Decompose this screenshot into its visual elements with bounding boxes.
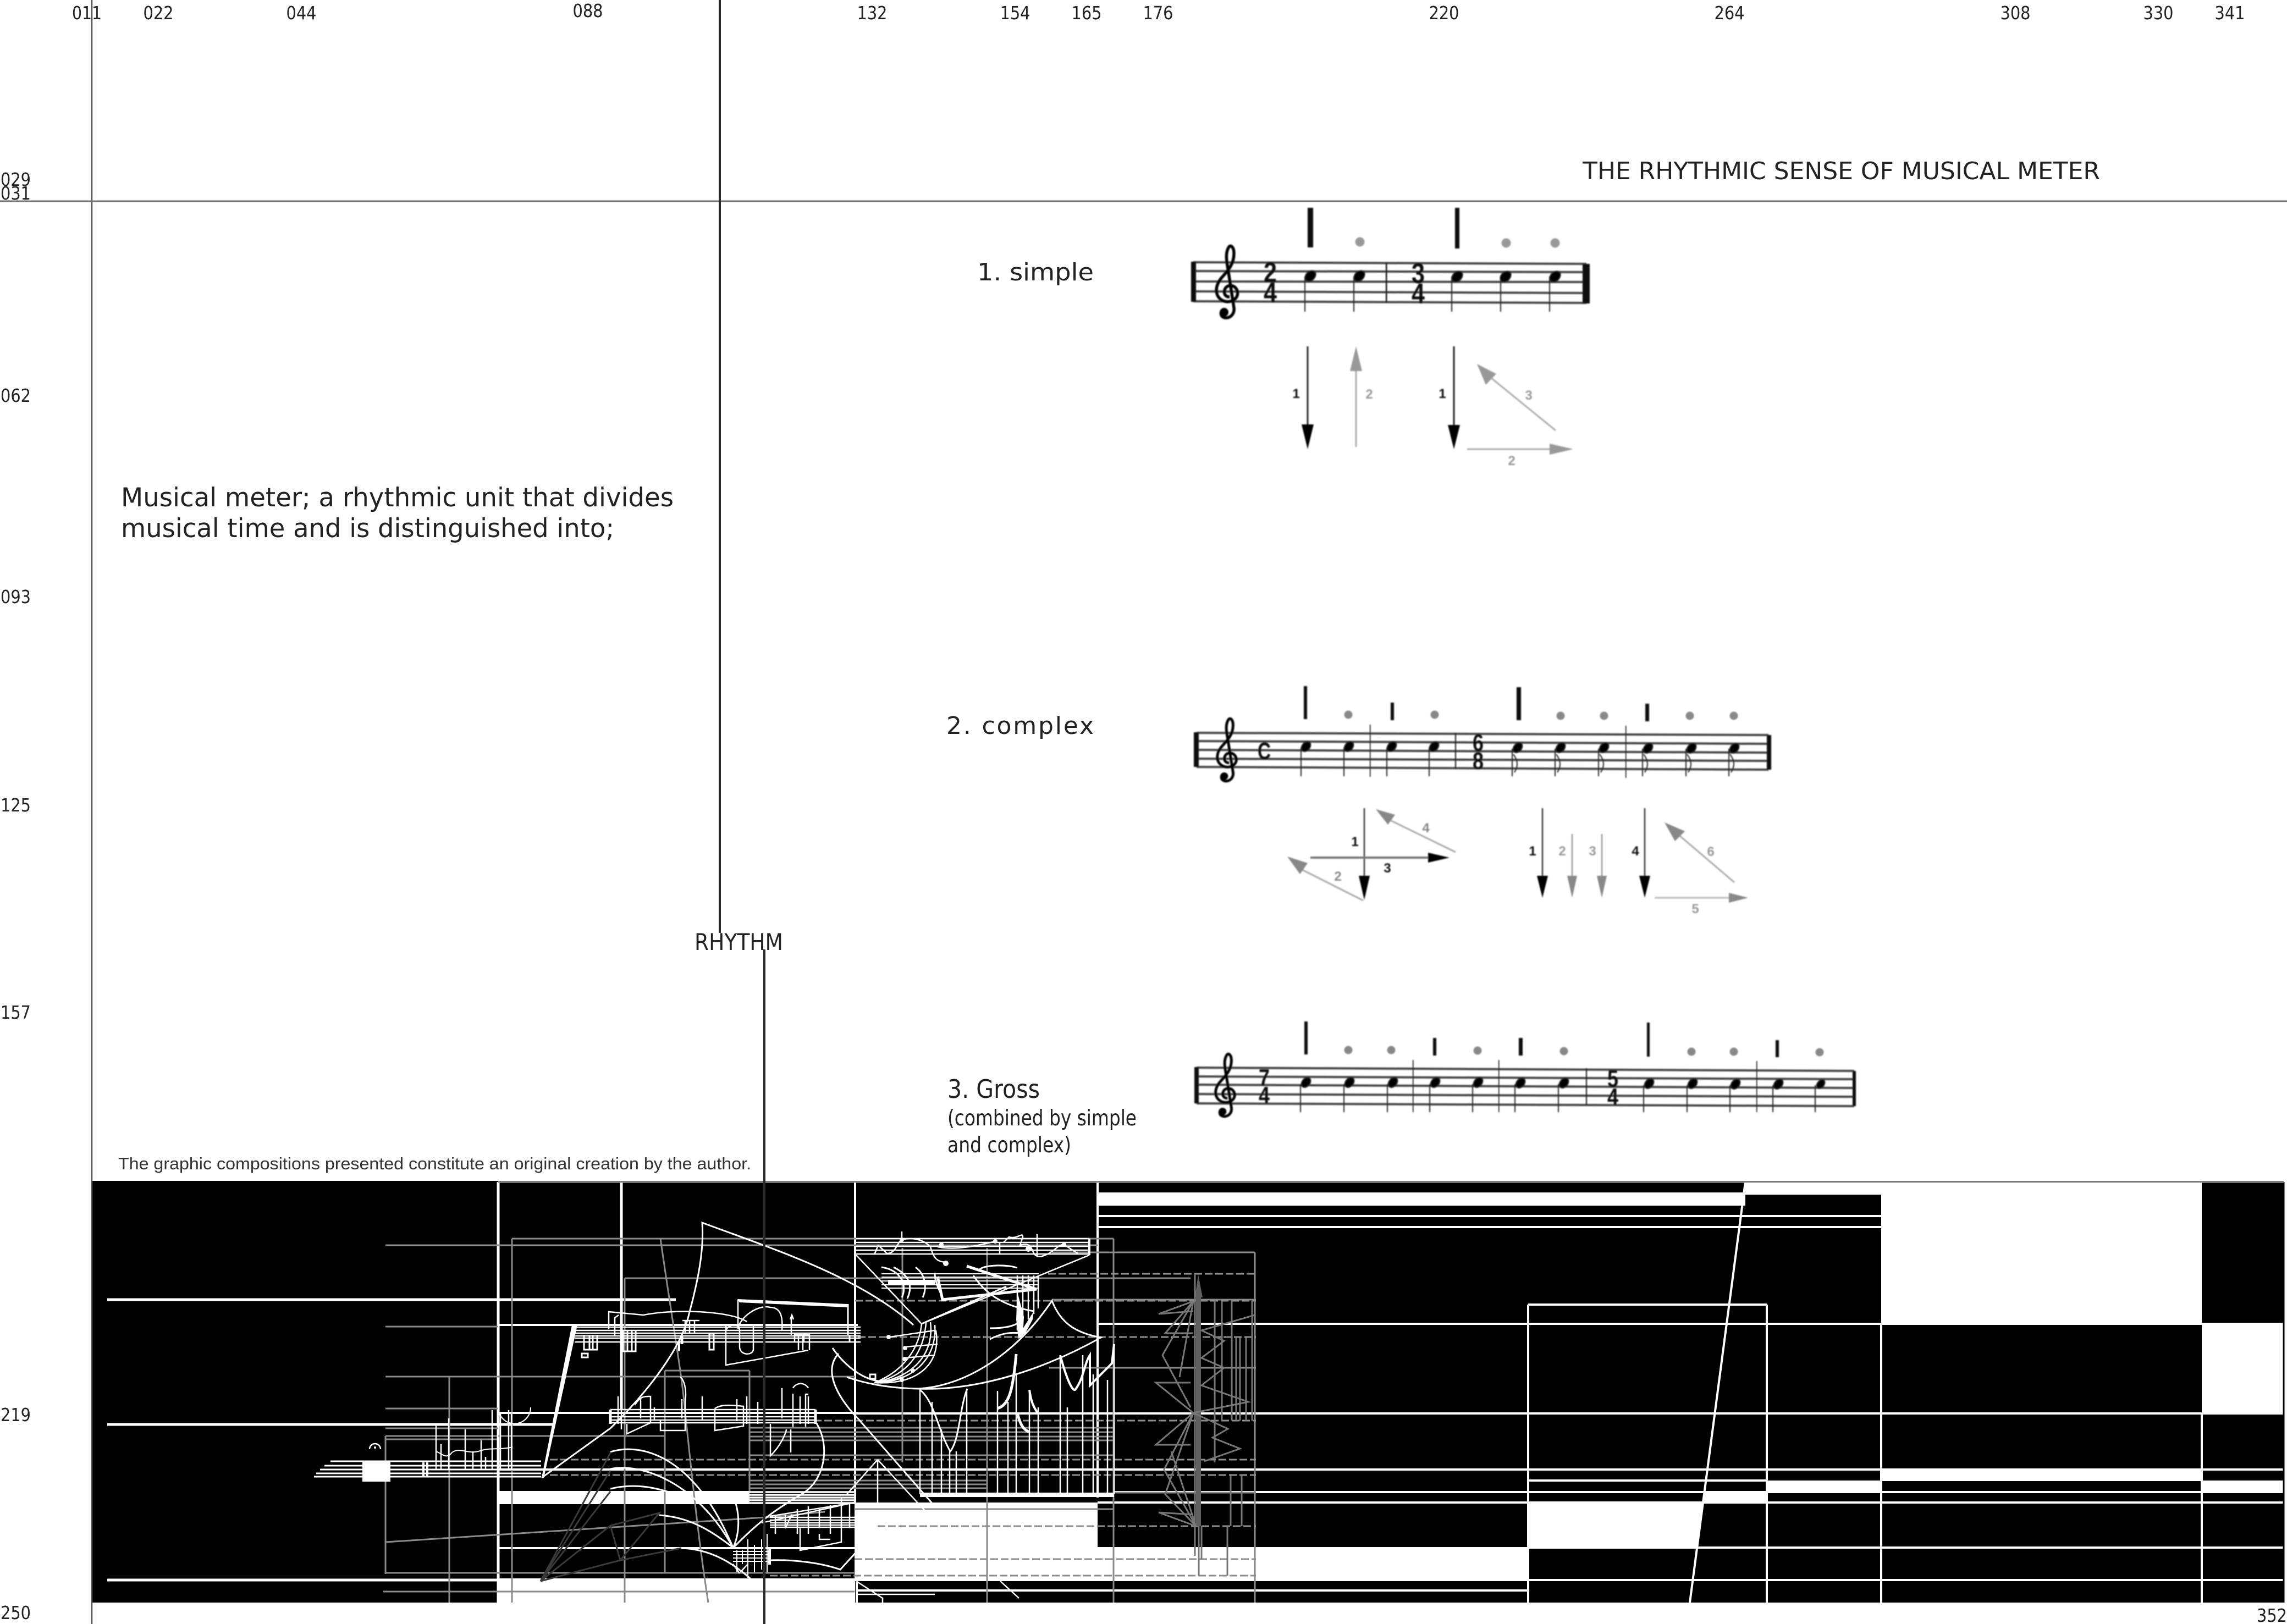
score 3: gross meter: 5 [1607, 1065, 1618, 1092]
left axis numbers: 250 [1, 1602, 31, 1623]
conducting arrows: four beats: 1 [1351, 835, 1359, 849]
conducting arrows: simple meter: 1 [1292, 386, 1300, 401]
top axis numbers: 165 [1071, 2, 1102, 24]
middle staff with stems [610, 1377, 815, 1456]
top axis numbers: 132 [857, 2, 888, 24]
top staff over the triangle [856, 1231, 1089, 1324]
top axis numbers: 011 [72, 2, 102, 24]
credit note: The graphic compositions presented constitute an original creation by the author. [118, 1154, 751, 1173]
strong beat ticks [1308, 208, 1459, 248]
bar lines [1194, 1060, 1856, 1112]
panel right edge [2283, 1182, 2284, 1603]
quarter notes [1303, 269, 1562, 312]
staff lines [1197, 1068, 1854, 1106]
score 3: gross meter: 4 [1259, 1082, 1270, 1109]
score 2: complex meter: 6 [1473, 730, 1484, 756]
small score with fermata at the left [314, 1407, 541, 1482]
label: 3. Gross: 3. Gross [947, 1074, 1040, 1104]
dark fan of thin lines [541, 1453, 681, 1581]
conducting arrows: simple meter: 1 [1439, 386, 1446, 401]
conducting arrows: six beats: 4 [1632, 844, 1639, 859]
main curved sweep [542, 1223, 935, 1581]
icon: treble clef [1217, 719, 1236, 781]
top axis numbers [72, 0, 2245, 24]
upper staff across the composition [575, 1299, 861, 1365]
icon: treble clef [1216, 246, 1238, 318]
conducting arrows: four beats: 3 [1384, 861, 1391, 876]
strong beat ticks [1304, 1021, 1779, 1057]
label: rhythm: RHYTHM [695, 929, 783, 955]
title: THE RHYTHMIC SENSE OF MUSICAL METER [1582, 157, 2100, 185]
weak beat dots [1355, 237, 1559, 247]
conducting arrows: six beats: 5 [1691, 902, 1699, 916]
top axis numbers: 176 [1143, 2, 1173, 24]
conducting arrows: simple meter: 2 [1365, 387, 1373, 402]
top axis numbers: 330 [2143, 2, 2173, 24]
top axis numbers: 044 [286, 2, 317, 24]
intro text: Musical meter; a rhythmic unit that divides [121, 483, 674, 513]
time signatures: 7 [1259, 1064, 1270, 1091]
score 3: gross meter [1194, 1021, 1856, 1117]
left axis numbers: 029 [1, 169, 31, 190]
score 1: simple meter: 3 [1412, 258, 1425, 290]
top axis numbers: 088 [573, 0, 603, 21]
conducting arrows: six beats: 2 [1558, 844, 1566, 859]
score 1: simple meter [1191, 208, 1590, 318]
common time and 6/8 signs: C [1258, 738, 1271, 765]
staff lines [1193, 262, 1586, 303]
black rhythm line upper segment [719, 0, 721, 933]
weak beat dots [1344, 710, 1738, 720]
grey construction lines [383, 1239, 1256, 1603]
left axis numbers: 031 [1, 183, 31, 204]
crescent of curved staff lines [870, 1322, 938, 1383]
white structural grid lines [107, 1182, 2284, 1603]
score 2: complex meter: 8 [1473, 748, 1484, 775]
bar lines [1194, 725, 1771, 778]
lower staff and dense cluster [733, 1460, 927, 1578]
notes [1299, 740, 1741, 776]
left axis numbers: 125 [1, 794, 31, 816]
conducting arrows: four beats [1287, 808, 1456, 901]
score 1: simple meter: 4 [1264, 277, 1277, 309]
left axis numbers: 062 [1, 385, 31, 406]
conducting arrows: four beats: 2 [1334, 869, 1342, 884]
icon: treble clef [1216, 1054, 1235, 1117]
left axis numbers [1, 169, 31, 1623]
conducting arrows: six beats: 1 [1529, 844, 1536, 859]
staff lines [1197, 733, 1768, 770]
label: combined by simple and complex: and complex) [947, 1133, 1071, 1158]
score 3: gross meter: 4 [1607, 1084, 1618, 1111]
left axis numbers: 157 [1, 1002, 31, 1023]
zigzag staff cluster [881, 1266, 1039, 1339]
white blocks of the composition [497, 1182, 2284, 1603]
conducting arrows: simple meter: 2 [1508, 454, 1516, 468]
left axis numbers: 219 [1, 1404, 31, 1426]
top axis numbers: 022 [143, 2, 174, 24]
left vertical axis line [91, 0, 92, 1624]
conducting arrows: six beats: 6 [1707, 844, 1715, 859]
label: 1. simple: 1. simple [977, 258, 1094, 286]
top axis numbers: 154 [1000, 2, 1030, 24]
lens-shaped sweep and hanging stems [847, 1301, 1114, 1603]
bar lines [1191, 262, 1590, 303]
weak beat dots [1344, 1046, 1823, 1057]
quarter notes [1299, 1076, 1826, 1112]
conducting arrows: simple meter [1292, 346, 1573, 468]
conducting arrows: six beats: 3 [1589, 844, 1596, 859]
grey fan and zigzag at the right end of the drawing [1156, 1274, 1255, 1576]
black rhythm line lower segment [763, 949, 765, 1624]
conducting arrows: simple meter: 3 [1525, 388, 1533, 403]
panel: black and white graphic composition [92, 1181, 2284, 1603]
top axis numbers: 220 [1429, 2, 1459, 24]
label: 2. complex: 2. complex [946, 712, 1094, 740]
top horizontal axis line [0, 200, 2287, 202]
top axis numbers: 341 [2215, 2, 2245, 24]
label: combined by simple and complex: (combined by simple [947, 1106, 1137, 1131]
score 2: complex meter [1194, 686, 1771, 781]
top axis numbers: 264 [1715, 2, 1744, 24]
time signatures: 2 [1264, 257, 1277, 289]
conducting arrows: six beats [1529, 808, 1748, 916]
top axis numbers: 308 [2001, 2, 2030, 24]
top edge of panel [498, 1181, 2284, 1183]
tapered white diagonal stroke [542, 1325, 577, 1478]
score 1: simple meter: 4 [1412, 278, 1425, 310]
intro text: musical time and is distinguished into; [121, 513, 614, 544]
grey dashed lines [550, 1274, 1256, 1576]
conducting arrows: four beats: 4 [1422, 821, 1430, 836]
strong beat ticks [1304, 686, 1649, 721]
left axis numbers: 093 [1, 586, 31, 607]
